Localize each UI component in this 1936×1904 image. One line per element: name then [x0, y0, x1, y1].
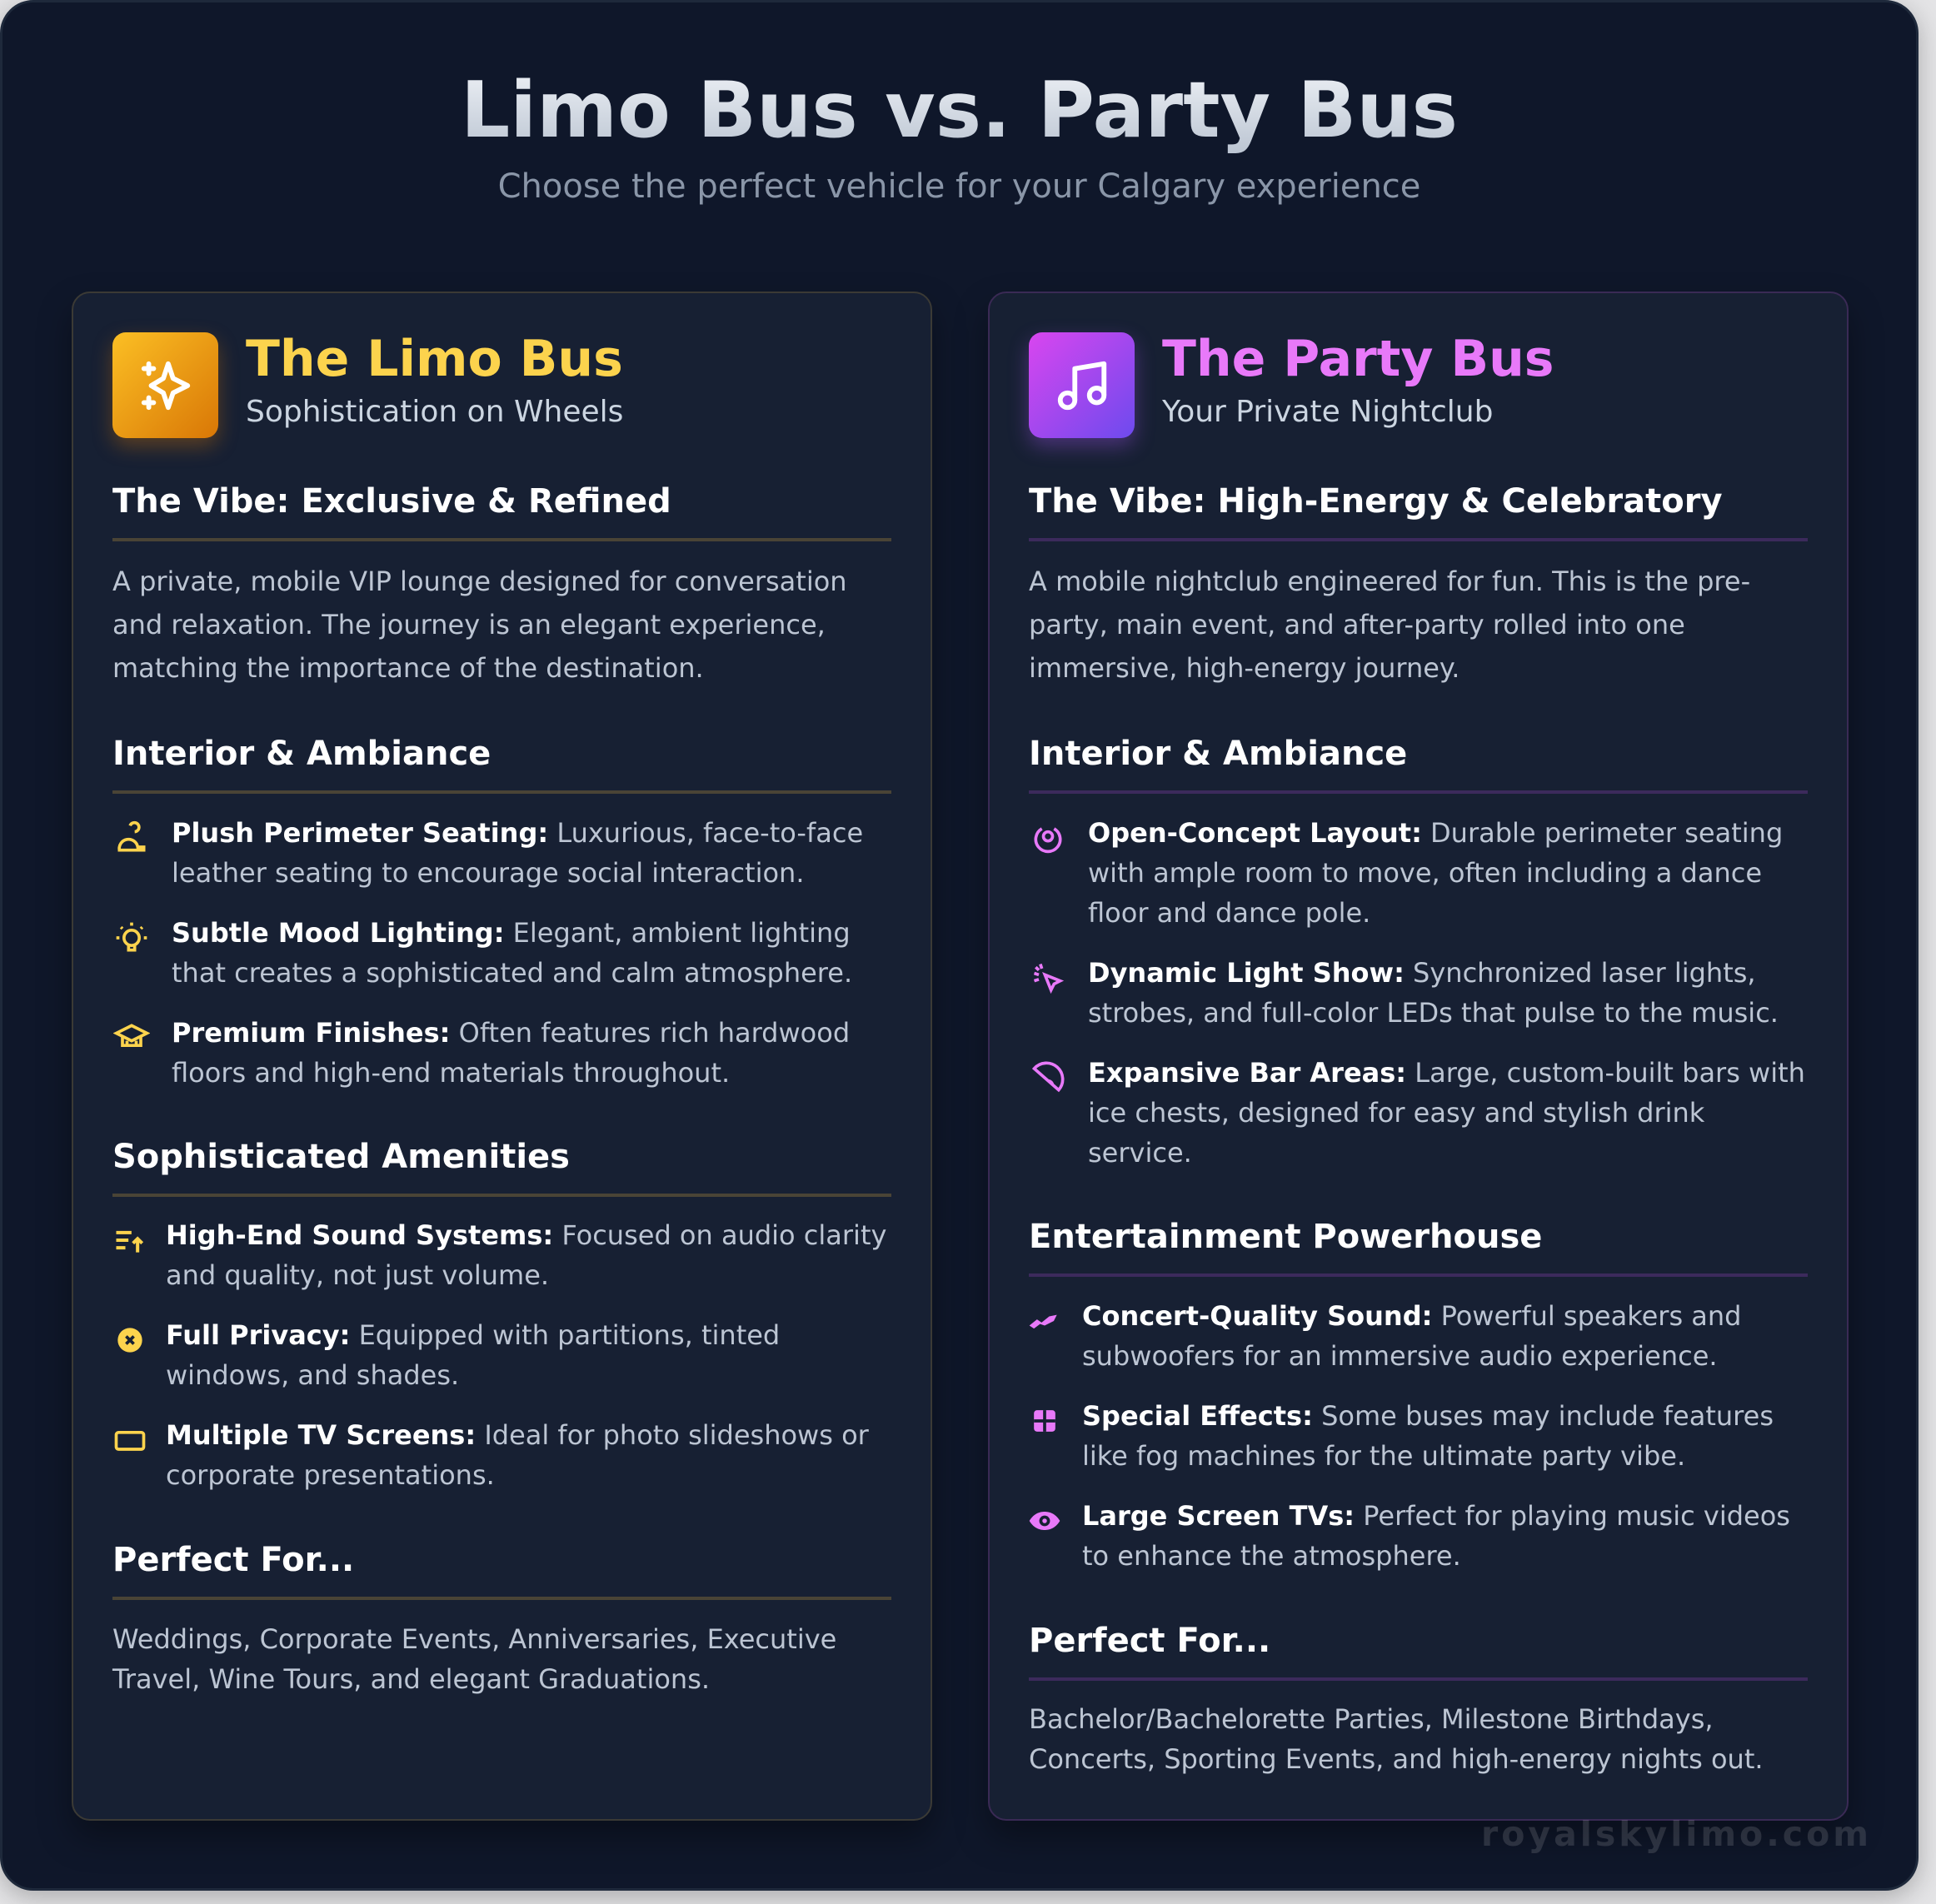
- text: vibe: matching the importance of the destination.: [112, 652, 704, 684]
- text: perfect for: Weddings, Corporate Events, Anniversaries, Executive: [112, 1623, 836, 1655]
- text: vibe: immersive, high-energy journey.: [1029, 652, 1459, 684]
- panel: limo bus: [72, 292, 932, 1821]
- item: privacy: [166, 1319, 780, 1391]
- item: tv: [166, 1419, 869, 1491]
- item: bar: [1088, 1057, 1805, 1169]
- item: lighting: [172, 917, 852, 989]
- text: perfect for: Concerts, Sporting Events, and high-energy nights out.: [1029, 1743, 1764, 1775]
- icon: cap: [113, 1024, 150, 1047]
- icon: seating: [117, 821, 145, 851]
- panel: party bus: [988, 292, 1849, 1821]
- subtitle: Choose the perfect vehicle for your Calgary experience: [498, 167, 1420, 206]
- text: perfect for: [1029, 1703, 1764, 1775]
- icon: effects: [1034, 1410, 1055, 1432]
- item: seating: leather seating to encourage social interaction.: [172, 857, 805, 889]
- text: vibe: and relaxation. The journey is an elegant experience,: [112, 609, 826, 640]
- item: finishes: Premium Finishes: Often features rich hardwood: [172, 1017, 850, 1049]
- item: bar: Expansive Bar Areas: Large, custom-built bars with: [1088, 1057, 1805, 1089]
- item: privacy: Full Privacy: Equipped with partitions, tinted: [166, 1319, 780, 1351]
- item: bar: ice chests, designed for easy and stylish drink: [1088, 1097, 1704, 1129]
- heading: vibe: The Vibe: High-Energy & Celebratory: [1029, 482, 1723, 521]
- item: sound: [166, 1219, 886, 1291]
- item: layout: floor and dance pole.: [1088, 897, 1370, 929]
- heading: interior: Interior & Ambiance: [1029, 735, 1407, 773]
- item: light show: Dynamic Light Show: Synchronized laser lights,: [1088, 957, 1756, 989]
- item: light show: [1088, 957, 1779, 1029]
- icon: privacy: [117, 1328, 142, 1353]
- item: light show: strobes, and full-color LEDs that pulse to the music.: [1088, 997, 1779, 1029]
- heading: amenities: Sophisticated Amenities: [112, 1138, 570, 1176]
- item: layout: Open-Concept Layout: Durable perimeter seating: [1088, 817, 1783, 849]
- item: tv: Multiple TV Screens: Ideal for photo slideshows or: [166, 1419, 869, 1451]
- title: Limo Bus vs. Party Bus: [461, 65, 1458, 155]
- item: tv: corporate presentations.: [166, 1459, 495, 1491]
- title: [0, 60, 1919, 160]
- party title: The Party Bus: [1162, 330, 1554, 388]
- text: perfect for: [112, 1623, 836, 1695]
- heading: perfect for: Perfect For...: [1029, 1622, 1270, 1660]
- item: tvs: Large Screen TVs: Perfect for playing music videos: [1082, 1500, 1790, 1532]
- item: sound: [1082, 1300, 1741, 1372]
- heading: entertainment: Entertainment Powerhouse: [1029, 1218, 1542, 1256]
- item: effects: [1082, 1400, 1774, 1472]
- party subtitle: Your Private Nightclub: [1162, 395, 1493, 429]
- item: sound: Concert-Quality Sound: Powerful speakers and: [1082, 1300, 1741, 1332]
- item: seating: Plush Perimeter Seating: Luxurious, face-to-face: [172, 817, 863, 849]
- icon: music: [1029, 332, 1135, 438]
- item: sound: subwoofers for an immersive audio experience.: [1082, 1340, 1718, 1372]
- item: effects: like fog machines for the ultimate party vibe.: [1082, 1440, 1685, 1472]
- heading: perfect for: Perfect For...: [112, 1541, 354, 1579]
- watermark: royalskylimo.com: [1481, 1814, 1872, 1854]
- item: seating: [172, 817, 863, 889]
- text: perfect for: Bachelor/Bachelorette Parties, Milestone Birthdays,: [1029, 1703, 1714, 1735]
- icon: sound: [117, 1231, 143, 1253]
- heading: interior: Interior & Ambiance: [112, 735, 491, 773]
- item: lighting: Subtle Mood Lighting: Elegant, ambient lighting: [172, 917, 851, 949]
- limo subtitle: Sophistication on Wheels: [246, 395, 623, 429]
- item: bar: service.: [1088, 1137, 1192, 1169]
- icon: sparkle: [112, 332, 218, 438]
- item: layout: [1088, 817, 1783, 929]
- icon: layout: [1034, 827, 1061, 853]
- heading: vibe: The Vibe: Exclusive & Refined: [112, 482, 671, 521]
- icon: light show: [1033, 963, 1064, 994]
- item: tvs: [1082, 1500, 1790, 1572]
- item: finishes: floors and high-end materials throughout.: [172, 1057, 730, 1089]
- icon: eye: [1030, 1512, 1060, 1530]
- icon: sound: [1030, 1314, 1057, 1329]
- item: privacy: windows, and shades.: [166, 1359, 459, 1391]
- icon: bulb: [117, 923, 147, 951]
- text: vibe: A mobile nightclub engineered for fun. This is the pre-: [1029, 566, 1750, 597]
- item: layout: with ample room to move, often including a dance: [1088, 857, 1762, 889]
- item: sound: High-End Sound Systems: Focused on audio clarity: [166, 1219, 886, 1251]
- limo title: The Limo Bus: [246, 330, 623, 388]
- text: vibe: party, main event, and after-party rolled into one: [1029, 609, 1685, 640]
- icon: tv: [115, 1431, 145, 1451]
- item: finishes: [172, 1017, 850, 1089]
- item: sound: and quality, not just volume.: [166, 1259, 549, 1291]
- text: vibe: [1029, 566, 1750, 684]
- text: vibe: A private, mobile VIP lounge designed for conversation: [112, 566, 847, 597]
- item: tvs: to enhance the atmosphere.: [1082, 1540, 1461, 1572]
- item: lighting: that creates a sophisticated and calm atmosphere.: [172, 957, 852, 989]
- text: perfect for: Travel, Wine Tours, and elegant Graduations.: [112, 1663, 710, 1695]
- icon: bar: [1032, 1061, 1065, 1093]
- text: vibe: [112, 566, 847, 684]
- item: effects: Special Effects: Some buses may include features: [1082, 1400, 1774, 1432]
